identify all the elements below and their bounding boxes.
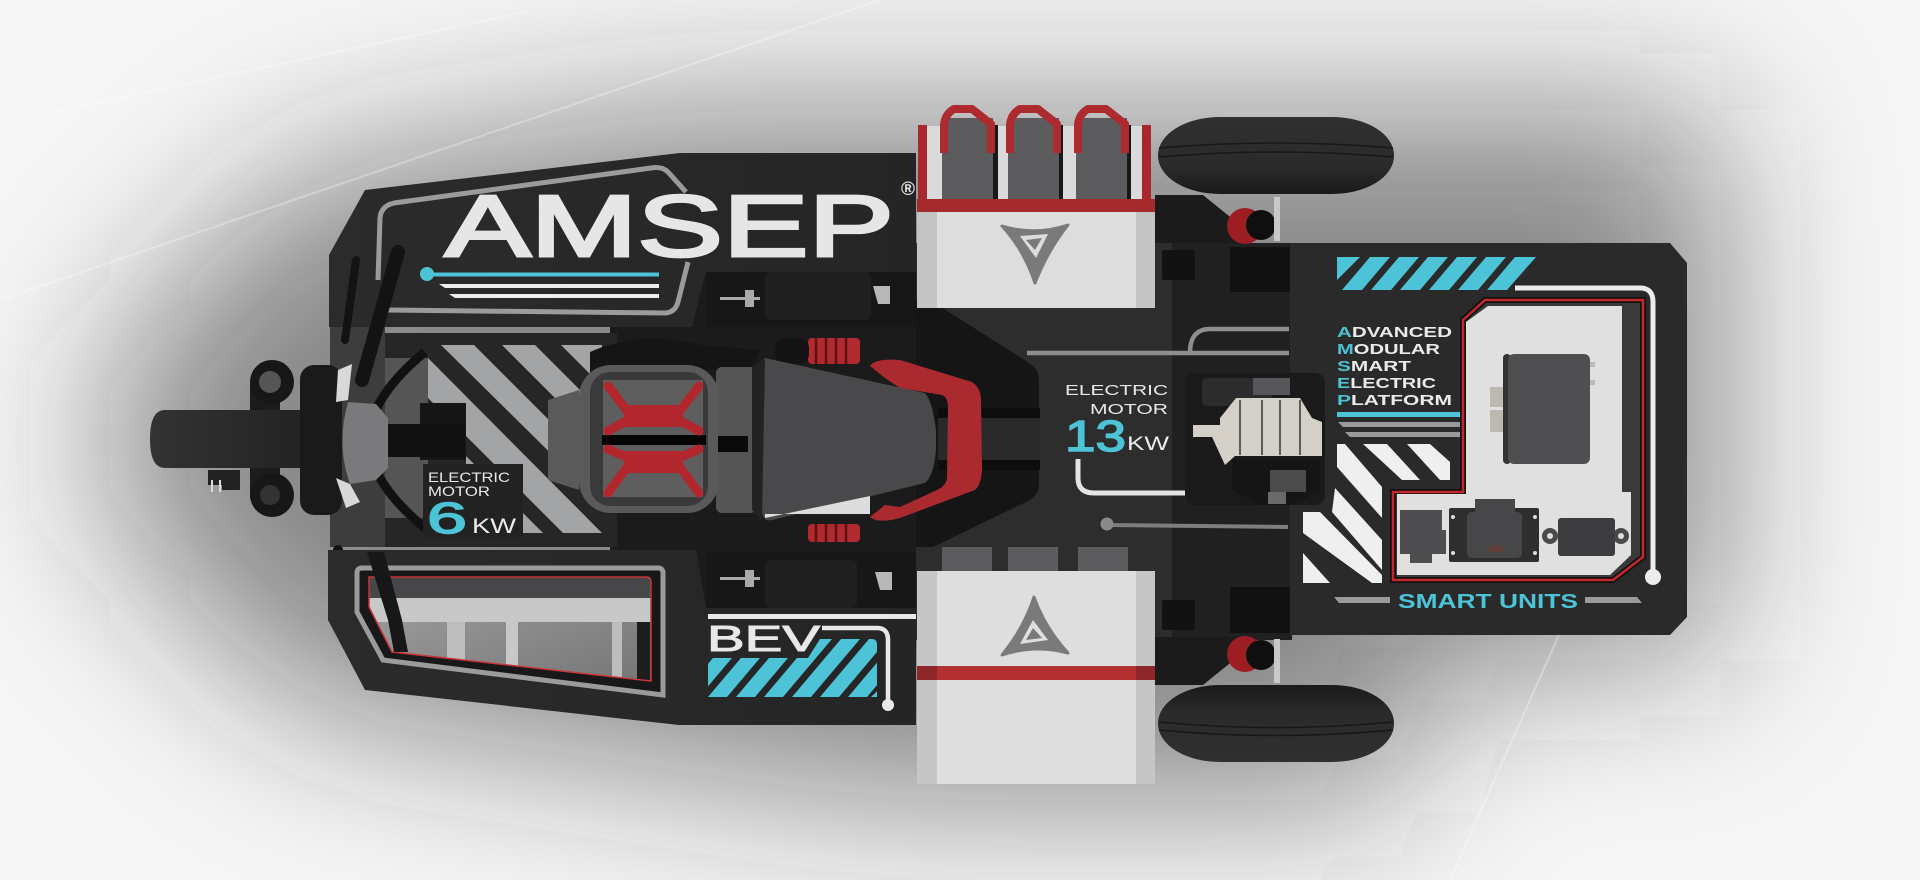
panel: electric motor 6 kW label: 6 [427,494,467,543]
red handles [944,109,1125,153]
panel: electric motor 13 kW: KW [1127,434,1169,455]
central chassis [610,243,1292,640]
hazard stripes: BEV [708,639,877,697]
unit: main controller [1490,354,1595,464]
heading: AMSEP expansion: A DVANCED [1337,324,1452,341]
connector line [1515,288,1653,577]
scooter frame and battery bay [548,339,760,513]
heading: AMSEP expansion [1337,324,1452,409]
white diagonal stripes [1303,444,1450,583]
window interior [370,578,650,680]
battery: lower pack [917,547,1155,784]
icon: headlight [336,364,388,508]
hazard stripes [428,345,602,533]
icon: triangle logo [1002,597,1068,655]
heading: AMSEP expansion: ELECTRIC [1337,375,1436,392]
wheel: lower [1158,685,1394,762]
panel: electric motor 13 kW: 13 [1065,412,1126,461]
battery: upper pack [917,109,1155,308]
logo: AMSEP wordmark: AMSEP [445,178,894,275]
panel: electric motor 6 kW label: MOTOR [428,483,490,499]
shock absorber: upper [706,272,916,327]
icon: triangle logo [1002,225,1068,283]
panel: electric motor 6 kW label [423,464,523,543]
panel: upper logo panel [329,153,916,327]
BEV label [707,614,916,711]
handlebar straps [338,252,398,660]
panel: front striped deck [385,333,617,547]
front suspension and tube [150,327,425,547]
registered mark: ® [901,179,915,200]
wheel: upper [1158,117,1394,194]
label: smart units: SMART UNITS [1398,591,1578,613]
seat [752,358,936,520]
hazard stripes: top [1337,257,1536,290]
panel: electric motor 13 kW [1027,329,1325,530]
icon: red battery brackets [608,386,699,493]
panel: electric motor 13 kW: MOTOR [1090,401,1168,418]
motor bay [1185,373,1325,505]
shock absorber: lower [706,552,916,608]
BEV label: BEV [707,618,820,659]
connector lines [1027,329,1289,527]
unit: small module [1400,510,1446,563]
divider bars [1337,412,1460,437]
red fairing [870,360,982,521]
icon: motor [1193,398,1322,505]
panel: electric motor 13 kW: ELECTRIC [1065,382,1168,399]
panel: electric motor 6 kW label: KW [472,515,516,538]
label: smart units [1334,591,1642,613]
heading: AMSEP expansion: P LATFORM [1337,392,1452,409]
panel: lower window panel [328,550,930,725]
panel: smart units platform [1303,257,1661,613]
window outline [357,568,663,695]
suspension arm and hub: lower [1155,587,1290,685]
unit: ecu [1449,499,1539,562]
accent lines [420,267,659,298]
heading: AMSEP expansion: M ODULAR [1337,341,1440,358]
panel: electric motor 6 kW label: ELECTRIC [428,469,510,485]
panel outline [378,168,688,313]
springs [775,338,860,542]
heading: AMSEP expansion: S MART [1337,358,1411,375]
smart units bay [1393,300,1643,580]
panel: rear platform base [1290,243,1687,635]
suspension arm and hub: upper [1155,195,1290,292]
battery cells [942,118,1127,199]
unit: gateway [1542,518,1629,556]
